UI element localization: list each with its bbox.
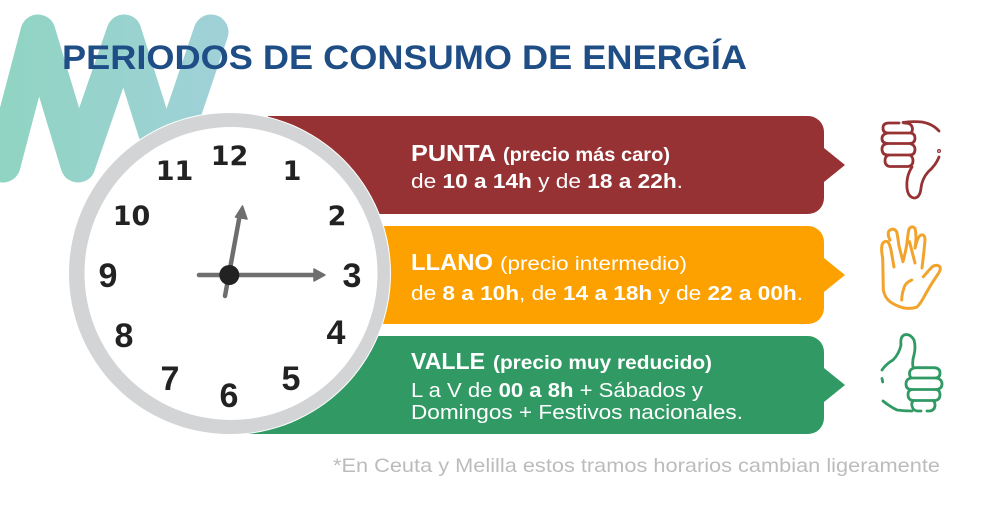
clock numbers upper: [113, 141, 346, 232]
panel: llano: [300, 226, 845, 324]
clock: [68, 112, 391, 435]
clock numbers upper: 1: [283, 156, 301, 187]
valle price note: (precio muy reducido): [493, 352, 712, 374]
punta price note: (precio más caro): [503, 144, 670, 166]
clock face: [84, 127, 378, 420]
title: PERIODOS DE CONSUMO DE ENERGÍA: [62, 37, 747, 77]
clock numbers lower: 8: [115, 317, 133, 355]
icon: thumbs up: [882, 335, 942, 411]
clock rim: [68, 112, 391, 435]
clock numbers lower: 4: [327, 314, 346, 352]
punta hours: de 10 a 14h y de 18 a 22h .: [411, 170, 683, 193]
llano hours: de 8 a 10h , de 14 a 18h y de 22 a 00h .: [411, 282, 803, 305]
clock numbers lower: 6: [220, 377, 238, 415]
clock numbers upper: 2: [328, 201, 346, 232]
valle hours line 2: Domingos + Festivos nacionales.: [411, 401, 743, 424]
clock numbers lower: 3: [343, 257, 361, 295]
clock numbers lower: 7: [161, 360, 179, 398]
clock numbers upper: 11: [156, 156, 193, 187]
footnote: *En Ceuta y Melilla estos tramos horarios cambian ligeramente: [333, 455, 940, 477]
icon: thumbs down: [882, 122, 940, 198]
valle hours line 1: L a V de 00 a 8h + Sábados y: [411, 379, 704, 402]
yellow banner: [300, 226, 845, 324]
panel: valle: [246, 336, 845, 434]
clock hands: [199, 206, 325, 296]
green banner: [246, 336, 845, 434]
clock numbers upper: 10: [113, 201, 150, 232]
red banner: [268, 116, 845, 214]
clock numbers lower: [99, 257, 361, 415]
punta heading: PUNTA: [411, 140, 496, 166]
llano heading: LLANO: [411, 249, 493, 275]
panel: punta: [268, 116, 845, 214]
background wave logo: [3, 32, 211, 165]
llano price note: (precio intermedio): [500, 253, 687, 275]
clock numbers lower: 9: [99, 257, 117, 295]
clock numbers upper: 12: [211, 141, 248, 172]
valle heading: VALLE: [411, 348, 485, 374]
clock numbers lower: 5: [282, 360, 300, 398]
icon: open hand: [882, 227, 940, 308]
